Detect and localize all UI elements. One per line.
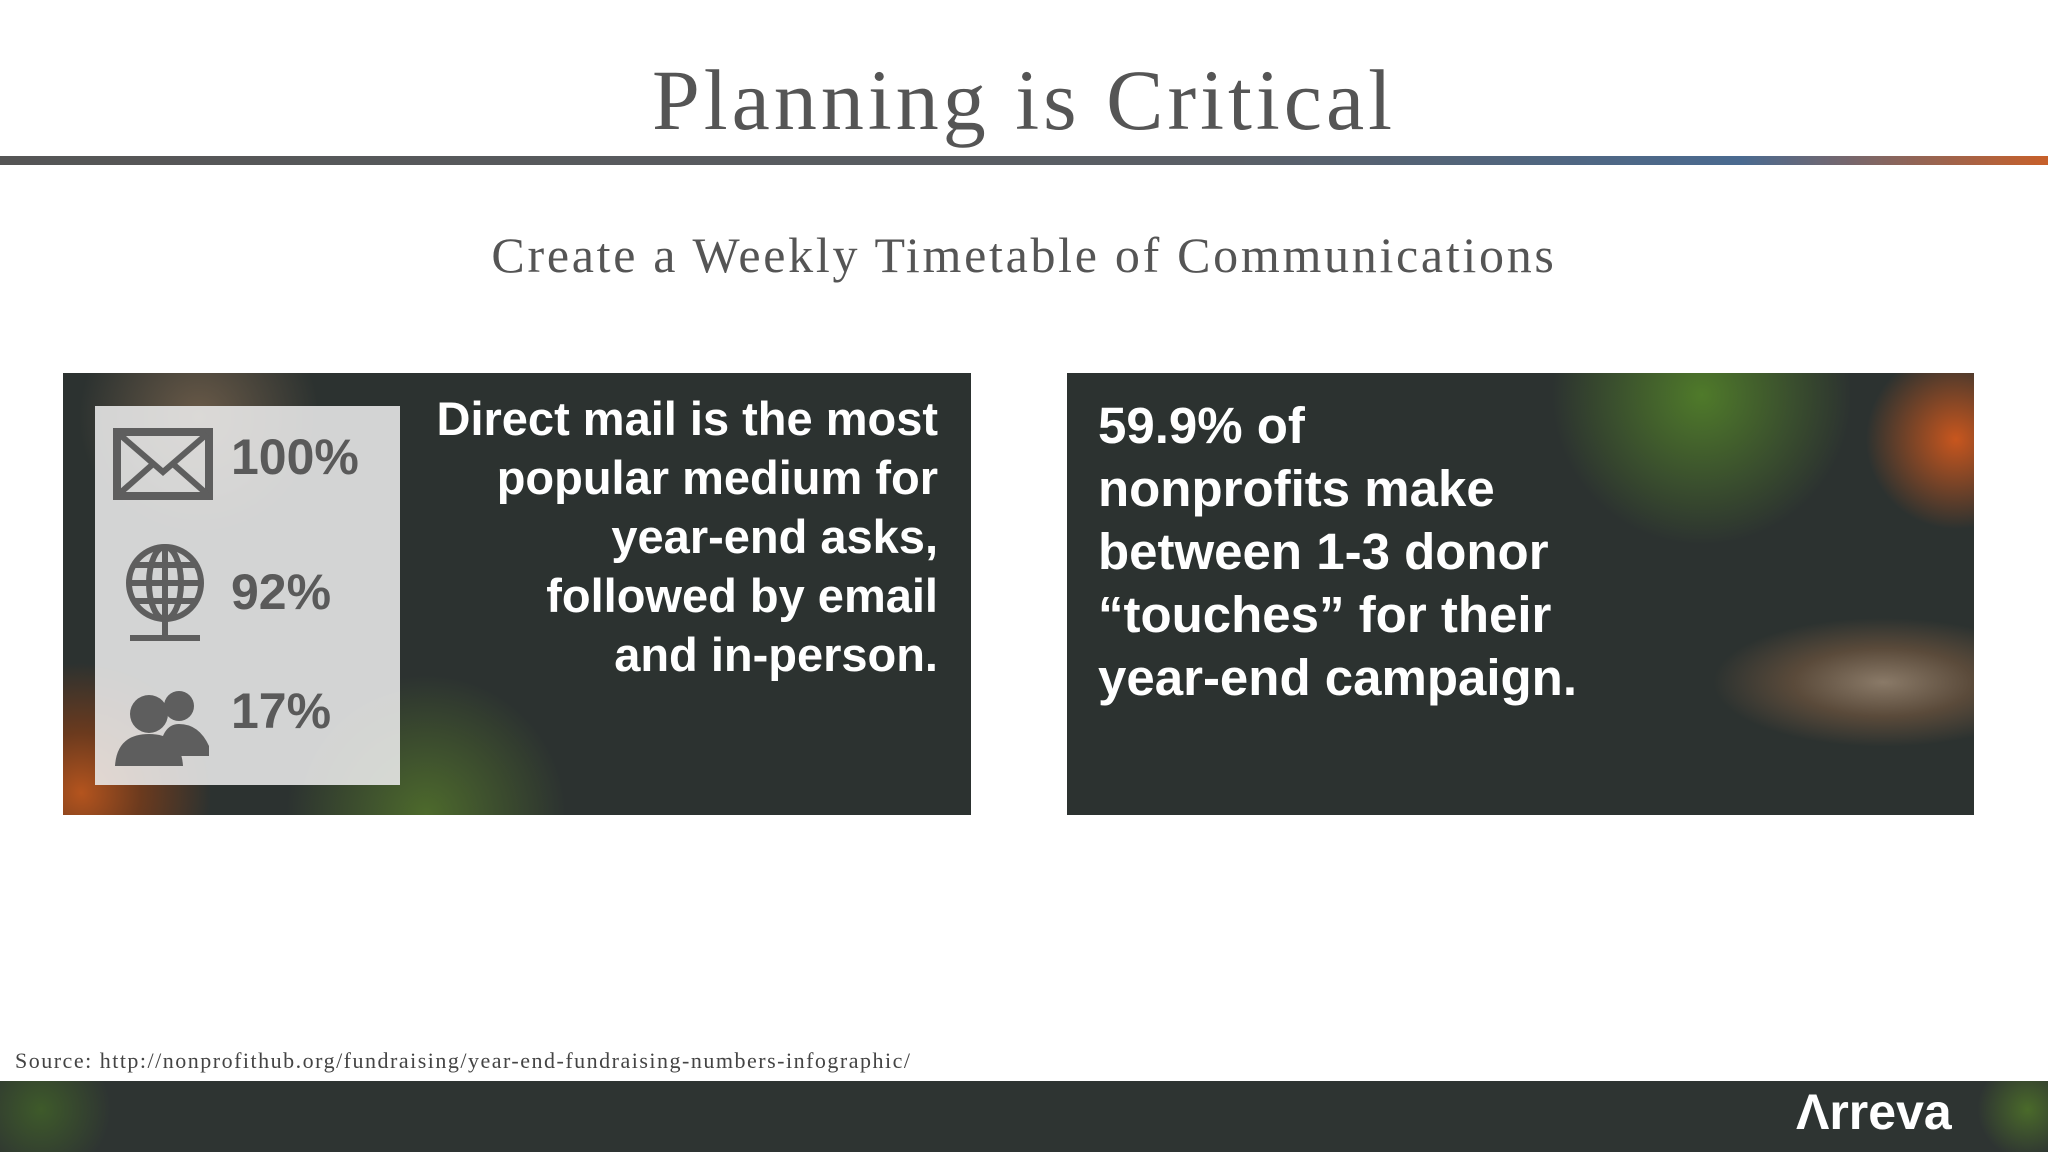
header rule xyxy=(0,156,2048,165)
text: direct mail: popular medium for xyxy=(497,451,938,504)
icon: envelope xyxy=(113,428,213,500)
text: donor touches: “touches” for their xyxy=(1098,586,1551,643)
footer band xyxy=(0,1081,2048,1152)
text: direct mail: year-end asks, xyxy=(611,510,938,563)
title: Planning is Critical xyxy=(652,52,1396,148)
stats box xyxy=(95,406,400,785)
text: donor touches: nonprofits make xyxy=(1098,460,1495,517)
source: Source: http://nonprofithub.org/fundraising/year-end-fundraising-numbers-infographic/ xyxy=(15,1048,911,1073)
icon: people xyxy=(115,691,209,766)
text: direct mail: followed by email xyxy=(546,569,938,622)
text: donor touches: between 1-3 donor xyxy=(1098,523,1549,580)
text: donor touches: year-end campaign. xyxy=(1098,649,1577,706)
stat: 17%: 17% xyxy=(231,683,331,739)
text: direct mail: and in-person. xyxy=(614,628,938,681)
text: donor touches: 59.9% of xyxy=(1098,397,1305,454)
text: direct mail: Direct mail is the most xyxy=(436,392,938,445)
stat: 92%: 92% xyxy=(231,564,331,620)
panel: donor touches xyxy=(1067,373,1974,815)
stat: 100%: 100% xyxy=(231,429,359,485)
text: direct mail xyxy=(436,392,938,681)
logo: Arreva: Λrreva xyxy=(1796,1084,1952,1140)
subtitle: Create a Weekly Timetable of Communications xyxy=(491,227,1557,283)
icon: globe xyxy=(126,544,204,641)
panel: direct mail xyxy=(63,373,971,815)
text: donor touches xyxy=(1098,397,1577,706)
